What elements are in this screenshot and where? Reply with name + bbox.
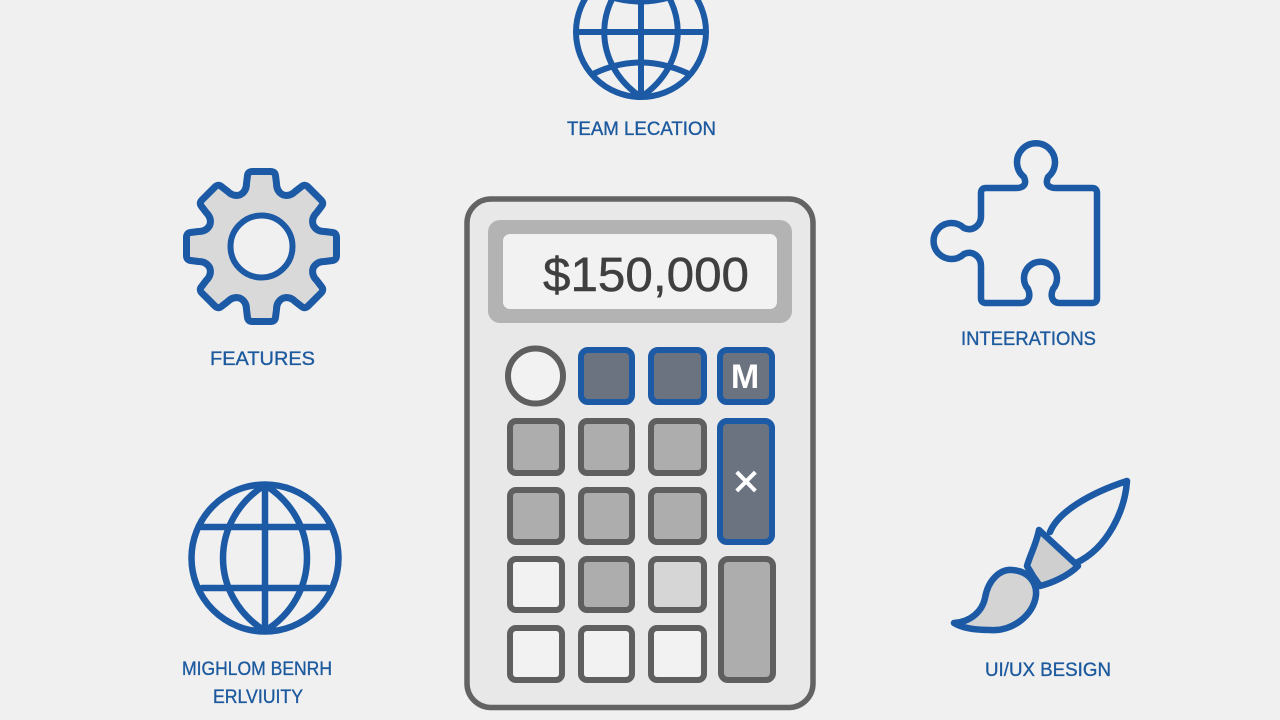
icon: features gear [186, 172, 336, 322]
keypad keys [510, 421, 704, 680]
label: lower-left factor [182, 658, 332, 708]
calculator [467, 199, 813, 708]
calculator display [488, 220, 792, 323]
label: features: FEATURES [210, 348, 315, 370]
label: team location: TEAM LECATION [567, 118, 716, 140]
icon: integrations puzzle piece [934, 143, 1097, 303]
multiply key [720, 421, 772, 542]
calculator body [467, 199, 813, 708]
label: lower-left factor: MIGHLOM BENRH [182, 658, 332, 680]
icon: neighbourhood globe [192, 484, 338, 632]
top function row [508, 348, 772, 404]
icon: team location globe [576, 0, 706, 97]
label: lower-left factor: ERLVIUITY [213, 686, 303, 708]
multiply key: × [733, 455, 759, 507]
label: integrations: INTEERATIONS [961, 328, 1096, 350]
calculator display: $150,000 [543, 249, 749, 302]
icon: design paintbrush [954, 481, 1127, 630]
top function row: M [731, 358, 759, 396]
tall grey key [721, 559, 773, 680]
label: ui/ux design: UI/UX BESIGN [985, 659, 1111, 681]
